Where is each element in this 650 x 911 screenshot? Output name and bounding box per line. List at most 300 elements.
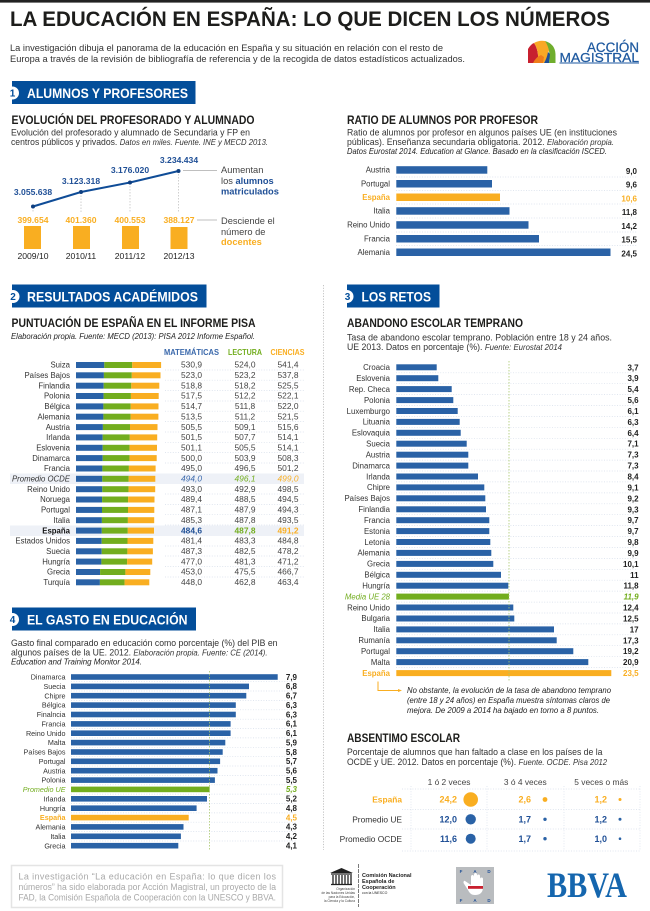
bar chart: abandono: 6,1: [627, 407, 639, 416]
table: PISA scores with stacked bars: Alemania: [37, 412, 71, 421]
bar chart: abandono: Lituania: [363, 418, 391, 427]
bar chart: ratio: 24,5: [621, 250, 638, 258]
bar chart: gasto: 6,3: [286, 710, 298, 719]
table: absentismo: España: [372, 794, 402, 804]
table: PISA scores with stacked bars: Suecia: [46, 547, 71, 556]
table: PISA scores with stacked bars: 482,5: [235, 546, 256, 556]
table: PISA scores with stacked bars: Polonia: [44, 392, 71, 401]
footer credit box: números” ha sido elaborada por Acción Magistral, un proyecto de la: [18, 882, 276, 892]
table: absentismo: 3 ó 4 veces: [504, 777, 547, 787]
table: PISA scores with stacked bars: 493,0: [181, 484, 202, 494]
bar chart: abandono: 3,7: [627, 363, 639, 372]
description: gasto: Education and Training Monitor 2014.: [11, 656, 142, 666]
bar chart: gasto: Portugal: [39, 757, 66, 766]
callout: mejora: [407, 685, 611, 715]
description: absentimo: Porcentaje de alumnos que han faltado a clase en los países de la: [347, 747, 603, 757]
table: absentismo: 1,0: [594, 834, 607, 844]
table: PISA scores with stacked bars: Hungría: [42, 557, 71, 566]
bar chart: docentes: 401.360: [65, 215, 97, 225]
bar chart: gasto: Irlanda: [44, 794, 66, 803]
bar chart: gasto: Francia: [42, 720, 66, 728]
bar chart: abandono: Francia: [364, 516, 391, 525]
bar chart: docentes: 2012/13: [163, 251, 195, 261]
logo: FAD: [456, 867, 494, 904]
logo: Acción Magistral: ACCIÓN: [587, 40, 639, 55]
description: ratio: Ratio de alumnos por profesor en algunos países UE (en instituciones: [347, 128, 617, 138]
description: absentimo: OCDE y UE. 2012. Datos en porcentaje (%). Fuente. OCDE. Pisa 2012: [347, 757, 607, 767]
table: PISA scores with stacked bars: 494,5: [278, 494, 299, 504]
table: PISA scores with stacked bars: 481,4: [181, 536, 202, 546]
table: PISA scores with stacked bars: Austria: [46, 423, 71, 432]
bar chart: gasto: 6,1: [286, 729, 298, 738]
table: PISA scores with stacked bars: 463,4: [278, 577, 299, 587]
logo: UNESCO: de las Naciones Unidas: [322, 891, 355, 895]
table: PISA scores with stacked bars: 477,0: [181, 556, 202, 566]
table: PISA scores with stacked bars: 508,3: [278, 453, 299, 463]
table: absentismo: Promedio UE: [352, 814, 402, 824]
bar chart: abandono: 19,2: [623, 647, 639, 656]
bar chart: docentes: [17, 215, 275, 261]
bar chart: docentes: 2009/10: [17, 251, 49, 261]
bar chart: gasto: Italia: [50, 832, 66, 841]
table: absentismo: 11,6: [440, 834, 457, 844]
table: PISA scores with stacked bars: España: [42, 526, 71, 535]
bar chart: ratio: 15,5: [621, 236, 638, 244]
table headers: PISA: LECTURA: [228, 348, 262, 357]
table: PISA scores with stacked bars: Italia: [54, 516, 71, 525]
bar chart: ratio: Alemania: [357, 248, 391, 257]
table: PISA scores with stacked bars: 501,2: [278, 463, 299, 473]
bar chart: gasto: Grecia: [44, 841, 66, 850]
table: PISA scores with stacked bars: 511,8: [235, 401, 256, 411]
bar chart: abandono: Polonia: [364, 396, 391, 405]
intro text: [10, 43, 465, 65]
bar chart: ratio: Italia: [374, 206, 391, 216]
bar chart: docentes: 400.553: [114, 215, 146, 225]
bar chart: abandono: Finlandia: [358, 505, 391, 514]
table: absentismo: 5 veces o más: [574, 777, 628, 787]
bar chart: abandono: 9,2: [627, 494, 639, 503]
panel: absentismo escolar: [340, 733, 640, 851]
bar chart: abandono: Reino Unido: [347, 603, 391, 612]
bar chart: gasto: Alemania: [36, 822, 66, 832]
description: abandono: Tasa de abandono escolar temprano. Población entre 18 y 24 años.: [347, 332, 612, 342]
table: PISA scores with stacked bars: 507,7: [235, 432, 256, 442]
bar chart: gasto: 4,3: [286, 823, 298, 832]
table: PISA scores with stacked bars: 503,9: [235, 453, 256, 463]
table: PISA scores with stacked bars: 483,3: [235, 536, 256, 546]
table: PISA scores with stacked bars: 522,1: [278, 391, 299, 401]
table: absentismo: 24,2: [439, 794, 457, 804]
table: PISA scores with stacked bars: 496,5: [235, 463, 256, 473]
line chart: alumnos matriculados: 3.176.020: [111, 165, 149, 175]
line chart: alumnos matriculados: los alumnos: [221, 176, 274, 186]
table: PISA scores with stacked bars: 499,0: [278, 474, 299, 484]
bar chart: ratio: 9,6: [626, 180, 638, 190]
panel: puntuación PISA: [10, 317, 304, 587]
table: PISA scores with stacked bars: 496,1: [235, 474, 255, 484]
table: PISA scores with stacked bars: 492,9: [235, 484, 256, 494]
panel: alumnos y profesores banner: 1: [10, 88, 16, 100]
logo: FAD: D: [487, 898, 491, 903]
bar chart: gasto: Austria: [43, 766, 66, 775]
table: PISA scores with stacked bars: [10, 360, 304, 587]
bar chart: abandono: 6,4: [627, 429, 639, 438]
bar chart: abandono: Suecia: [366, 440, 391, 448]
table: absentismo: Promedio OCDE: [340, 834, 402, 844]
table: PISA scores with stacked bars: Bélgica: [44, 402, 71, 411]
bar chart: abandono: 9,1: [627, 483, 639, 492]
bar chart: abandono: 7,3: [627, 462, 639, 471]
intro text: Europa a través de la revisión de bibliografía de referencia y de la recogida de datos estadísticos actualizados.: [10, 54, 465, 65]
table: PISA scores with stacked bars: 498,5: [278, 484, 299, 494]
table: PISA scores with stacked bars: 481,3: [235, 556, 256, 566]
table: PISA scores with stacked bars: 514,1: [278, 442, 299, 452]
bar chart: ratio: Portugal: [361, 179, 390, 188]
logo: FAD: D: [487, 869, 491, 874]
bar chart: abandono: 11: [630, 571, 639, 580]
description: ratio: [347, 128, 617, 156]
bar chart: gasto: Chipre: [44, 691, 66, 700]
bar chart: abandono: Eslovaquia: [352, 429, 391, 438]
table: PISA scores with stacked bars: 475,5: [235, 567, 256, 577]
table: absentismo: 1,7: [518, 834, 531, 844]
description: gasto: Gasto final comparado en educación como porcentaje (%) del PIB en: [11, 638, 278, 648]
bar chart: abandono: 10,1: [623, 560, 639, 569]
bar chart: abandono: 12,4: [623, 604, 639, 612]
bar chart: abandono: Países Bajos: [344, 494, 390, 503]
bar chart: abandono: 6,3: [627, 418, 639, 427]
table: PISA scores with stacked bars: 513,5: [181, 411, 202, 421]
table: PISA scores with stacked bars: 524,0: [235, 360, 256, 370]
table: PISA scores with stacked bars: 489,4: [181, 494, 202, 504]
line chart: alumnos matriculados: 3.234.434: [160, 155, 198, 165]
bar chart: gasto: 5,7: [286, 757, 298, 766]
logo: UNESCO: Cooperación: [362, 885, 396, 891]
table: PISA scores with stacked bars: 523,0: [181, 370, 202, 380]
bar chart: abandono: Rumanía: [358, 636, 391, 645]
panel: gasto en educación chart: [11, 638, 298, 850]
bar chart: abandono: 17,3: [623, 636, 639, 645]
callout: mejora: No obstante, la evolución de la tasa de abandono temprano: [407, 685, 611, 695]
bar chart: abandono: Alemania: [357, 549, 391, 558]
footer credit box: FAD, la Comisión Española de Cooperación con la UNESCO y BBVA.: [18, 892, 276, 902]
line chart: alumnos matriculados: 3.055.638: [14, 187, 52, 197]
bar chart: abandono: Hungría: [362, 582, 391, 590]
bar chart: abandono: Austria: [366, 450, 391, 459]
table: PISA scores with stacked bars: 487,1: [181, 505, 202, 515]
line chart: alumnos matriculados: Aumentan: [221, 165, 263, 175]
table: absentismo: [340, 777, 640, 851]
bar chart: ratio: 14,2: [621, 222, 638, 231]
bar chart: abandono: 7,1: [627, 440, 639, 449]
panel: alumnos y profesores banner: [6, 81, 196, 104]
table: PISA scores with stacked bars: 493,5: [278, 515, 299, 525]
table headers: PISA: CIENCIAS: [270, 348, 304, 357]
panel: los retos banner: [340, 284, 440, 308]
bar chart: gasto: 4,2: [286, 832, 298, 841]
bar chart: gasto: Dinamarca: [31, 673, 66, 682]
table: absentismo: 1 ó 2 veces: [428, 777, 470, 787]
table headers: PISA: MATEMÁTICAS: [164, 348, 219, 357]
logo: FAD: F: [460, 898, 463, 903]
table: PISA scores with stacked bars: 448,0: [181, 577, 202, 587]
table: PISA scores with stacked bars: Promedio OCDE: [12, 474, 71, 484]
bar chart: abandono: 3,9: [627, 374, 639, 383]
bar chart: gasto: 6,7: [286, 692, 298, 700]
table: PISA scores with stacked bars: 484,6: [181, 525, 202, 535]
table: PISA scores with stacked bars: 487,3: [181, 546, 202, 556]
bar chart: gasto: Promedio UE: [23, 785, 66, 794]
table: PISA scores with stacked bars: 491,2: [278, 525, 299, 535]
table: PISA scores with stacked bars: 485,3: [181, 515, 202, 525]
bar chart: abandono: 9,9: [627, 549, 639, 558]
table: PISA scores with stacked bars: 521,5: [278, 411, 299, 421]
panel: abandono escolar temprano: [344, 318, 639, 715]
bar chart: abandono: 8,4: [627, 472, 639, 482]
table: PISA scores with stacked bars: 495,0: [181, 463, 202, 473]
line chart: alumnos matriculados: [14, 155, 279, 220]
bar chart: gasto: 5,8: [286, 748, 298, 757]
table: PISA scores with stacked bars: 518,8: [181, 380, 202, 390]
table: PISA scores with stacked bars: 515,6: [278, 422, 299, 432]
panel: el gasto en educación banner: 4: [10, 615, 16, 626]
arrow: España callout: [378, 682, 402, 692]
logo: FAD: A: [473, 898, 477, 903]
table: PISA scores with stacked bars: Suiza: [50, 361, 71, 370]
table: PISA scores with stacked bars: 466,7: [278, 567, 299, 577]
bar chart: abandono: Bulgaria: [361, 614, 391, 623]
logo: BBVA: BBVA: [547, 865, 627, 905]
table: PISA scores with stacked bars: 512,2: [235, 391, 256, 401]
bar chart: gasto: España: [40, 813, 66, 822]
bar chart: docentes: 388.127: [163, 215, 195, 225]
panel: los retos banner: 3: [345, 292, 351, 303]
bar chart: abandono: 7,3: [627, 451, 639, 460]
description: evolución: Evolución del profesorado y alumnado de Secundaria y FP en: [11, 128, 250, 138]
table: PISA scores with stacked bars: 462,8: [235, 577, 256, 587]
heading: abandono: ABANDONO ESCOLAR TEMPRANO: [347, 318, 523, 330]
table: absentismo: 1,2: [594, 794, 607, 804]
heading: PISA: PUNTUACIÓN DE ESPAÑA EN EL INFORME PISA: [12, 317, 256, 330]
logo: Acción Magistral: MAGISTRAL: [560, 50, 639, 65]
bar chart: gasto: 4,5: [286, 813, 298, 822]
table: PISA scores with stacked bars: 478,2: [278, 546, 299, 556]
description: abandono: [347, 332, 612, 352]
bar chart: abandono: Rep. Checa: [349, 385, 391, 394]
bar chart: abandono: Bélgica: [364, 571, 391, 580]
table: PISA scores with stacked bars: 537,8: [278, 370, 299, 380]
table: PISA scores with stacked bars: Francia: [44, 464, 71, 473]
line chart: alumnos matriculados: 3.123.318: [62, 176, 100, 186]
bar chart: gasto: 6,8: [286, 682, 298, 691]
bar chart: gasto: 6,3: [286, 701, 298, 710]
panel: resultados académicos banner: RESULTADOS ACADÉMIDOS: [27, 288, 198, 304]
bar chart: abandono: Media UE 28: [345, 592, 391, 601]
logo: UNESCO: [322, 864, 412, 907]
bar chart: docentes: Desciende el: [221, 216, 275, 226]
bar chart: abandono: Grecia: [367, 560, 391, 569]
bar chart: abandono: 9,7: [627, 516, 639, 525]
table: PISA scores with stacked bars: 487,8: [235, 515, 256, 525]
table: PISA scores with stacked bars: 511,2: [235, 411, 256, 421]
description: evolución: centros públicos y privados. Datos en miles. Fuente. INE y MECD 2013.: [11, 137, 268, 147]
description: gasto: algunos países de la UE. 2012. Elaboración propia. Fuente: CE (2014).: [11, 648, 268, 658]
heading: absentimo: ABSENTIMO ESCOLAR: [347, 733, 461, 745]
bar chart: abandono: 9,7: [627, 527, 639, 536]
table: PISA scores with stacked bars: Eslovenia: [36, 444, 71, 452]
bar chart: ratio: 9,0: [626, 167, 638, 176]
bar chart: abandono: Malta: [371, 658, 391, 667]
bar chart: ratio: Francia: [364, 234, 391, 243]
table: PISA scores with stacked bars: 514,1: [278, 432, 299, 442]
source note: PISA: Elaboración propia. Fuente: MECD (2013): PISA 2012 Informe Español.: [11, 331, 255, 341]
logo: UNESCO: con la UNESCO: [362, 891, 388, 895]
table: PISA scores with stacked bars: 487,8: [235, 525, 256, 535]
bar chart: gasto: 5,3: [286, 785, 298, 794]
table: PISA scores with stacked bars: Noruega: [40, 495, 71, 504]
bar chart: abandono: Estonia: [364, 527, 391, 536]
bar chart: abandono: Croacia: [363, 363, 391, 372]
table: PISA scores with stacked bars: 501,5: [181, 432, 202, 442]
bar chart: abandono: [344, 361, 639, 681]
bar chart: docentes: número de: [221, 227, 265, 237]
bar chart: abandono: 11,8: [623, 582, 639, 591]
table: PISA scores with stacked bars: 541,4: [278, 360, 299, 370]
bar chart: gasto: Suecia: [44, 682, 66, 691]
table: PISA scores with stacked bars: Países Bajos: [24, 371, 70, 380]
table: PISA scores with stacked bars: Grecia: [47, 568, 71, 577]
bar chart: gasto: 4,8: [286, 804, 298, 813]
table: PISA scores with stacked bars: 505,5: [181, 422, 202, 432]
logo: UNESCO: Comisión Nacional: [362, 873, 412, 879]
table: PISA scores with stacked bars: Irlanda: [46, 433, 71, 442]
title: LA EDUCACIÓN EN ESPAÑA: LO QUE DICEN LOS NÚMEROS: [10, 6, 610, 31]
table: PISA scores with stacked bars: 522,0: [278, 401, 299, 411]
callout: mejora: mejora. De 2009 a 2014 ha bajado en torno a 8 puntos.: [407, 705, 599, 715]
panel: resultados académicos banner: [6, 284, 206, 308]
table: absentismo: 2,6: [518, 794, 531, 804]
bar chart: gasto: Malta: [48, 738, 66, 747]
bar chart: abandono: Dinamarca: [352, 461, 391, 470]
table: absentismo: 1,7: [518, 814, 531, 824]
table headers: PISA: [164, 348, 304, 357]
bar chart: gasto: 5,5: [286, 776, 298, 785]
bar chart: gasto: 6,1: [286, 720, 298, 729]
panel: evolución del profesorado y alumnado: [11, 114, 279, 261]
bar chart: abandono: Portugal: [361, 647, 390, 656]
bar chart: abandono: Chipre: [367, 483, 390, 492]
bar chart: abandono: Letonia: [364, 538, 391, 547]
table: PISA scores with stacked bars: 517,5: [181, 391, 202, 401]
bar chart: abandono: 12,5: [623, 614, 639, 624]
table: PISA scores with stacked bars: 525,5: [278, 380, 299, 390]
table: PISA scores with stacked bars: 471,2: [278, 556, 299, 566]
logo: UNESCO: Española de: [362, 879, 394, 885]
bar chart: abandono: España: [362, 669, 391, 678]
table: PISA scores with stacked bars: Turquía: [43, 578, 71, 587]
table: PISA scores with stacked bars: Portugal: [41, 506, 70, 515]
bar chart: abandono: 23,5: [623, 669, 639, 678]
table: absentismo: 12,0: [439, 814, 457, 824]
bar chart: ratio: 11,8: [622, 208, 638, 217]
logo: Acción Magistral: [528, 40, 639, 65]
bar chart: abandono: 9,8: [627, 538, 639, 547]
panel: resultados académicos banner: 2: [10, 292, 16, 303]
bar chart: gasto: 5,9: [286, 738, 298, 747]
bar chart: abandono: 17: [630, 625, 639, 634]
bar chart: gasto: [23, 671, 298, 850]
table: absentismo: 1,2: [594, 814, 607, 824]
bar chart: gasto: 4,1: [286, 842, 298, 850]
bar chart: gasto: 5,2: [286, 795, 298, 804]
bar chart: docentes: 2010/11: [66, 251, 96, 261]
bar chart: docentes: 399.654: [17, 215, 49, 225]
bar chart: abandono: 5,4: [627, 385, 639, 394]
panel: los retos banner: LOS RETOS: [362, 288, 431, 304]
description: abandono: UE 2013. Datos en porcentaje (%). Fuente: Eurostat 2014: [347, 342, 562, 352]
bar chart: abandono: Eslovenia: [356, 374, 391, 383]
logo: FAD: F: [460, 869, 463, 874]
table: PISA scores with stacked bars: 509,1: [235, 422, 256, 432]
callout: mejora: (entre 18 y 24 años) en España muestra síntomas claros de: [407, 695, 610, 705]
bar chart: gasto: Hungría: [40, 804, 66, 813]
bar chart: abandono: Italia: [374, 625, 391, 634]
table: PISA scores with stacked bars: 494,0: [181, 474, 202, 484]
footer credit box: [12, 866, 282, 908]
logo: UNESCO: para la Educación,: [329, 895, 355, 899]
description: ratio: Datos Eurostat 2014. Education at Glance. Basado en la clasificación ISCED.: [347, 146, 607, 156]
line chart: alumnos matriculados: matriculados: [221, 186, 279, 196]
description: evolución: [11, 128, 268, 147]
bar chart: ratio: Austria: [366, 166, 391, 174]
table: PISA scores with stacked bars: Estados Unidos: [15, 537, 70, 546]
table: PISA scores with stacked bars: 501,1: [181, 442, 202, 452]
bar chart: ratio: [347, 166, 638, 258]
bar chart: abandono: 11,9: [624, 593, 639, 602]
bar chart: abandono: 9,3: [627, 505, 639, 514]
panel: alumnos y profesores banner: ALUMNOS Y PROFESORES: [27, 85, 188, 101]
table: PISA scores with stacked bars: 453,0: [181, 567, 202, 577]
bar chart: abandono: 5,6: [627, 396, 639, 405]
table: PISA scores with stacked bars: Finlandia: [38, 381, 71, 390]
table: PISA scores with stacked bars: 484,8: [278, 536, 299, 546]
panel: el gasto en educación banner: EL GASTO EN EDUCACIÓN: [27, 610, 188, 628]
table: PISA scores with stacked bars: 494,3: [278, 505, 299, 515]
table: PISA scores with stacked bars: Dinamarca: [32, 454, 71, 463]
bar chart: gasto: 5,6: [286, 766, 298, 776]
bar chart: abandono: Luxemburgo: [347, 407, 391, 416]
description: absentimo: [347, 747, 607, 767]
panel: el gasto en educación banner: [6, 608, 196, 630]
description: gasto: [11, 638, 278, 666]
table: PISA scores with stacked bars: 530,9: [181, 360, 202, 370]
bar chart: docentes: docentes: [221, 237, 262, 247]
description: ratio: públicas). Enseñanza secundaria obligatoria. 2012. Elaboración propia.: [347, 137, 614, 147]
bar chart: ratio: España: [362, 193, 391, 202]
table: PISA scores with stacked bars: 514,7: [181, 401, 202, 411]
table: PISA scores with stacked bars: 523,2: [235, 370, 256, 380]
bar chart: ratio: Reino Unido: [347, 220, 391, 230]
table: PISA scores with stacked bars: 518,2: [235, 380, 256, 390]
bar chart: gasto: 7,9: [286, 673, 298, 682]
table: PISA scores with stacked bars: 487,9: [235, 505, 256, 515]
intro text: La investigación dibuja el panorama de la educación en España y su situación en relación con el resto de: [10, 43, 443, 54]
logo: UNESCO: la Ciencia y la Cultura: [324, 899, 355, 903]
bar chart: gasto: Finalncia: [37, 710, 66, 719]
panel: ratio de alumnos por profesor: [347, 115, 638, 258]
logo: FAD: A: [473, 869, 477, 874]
